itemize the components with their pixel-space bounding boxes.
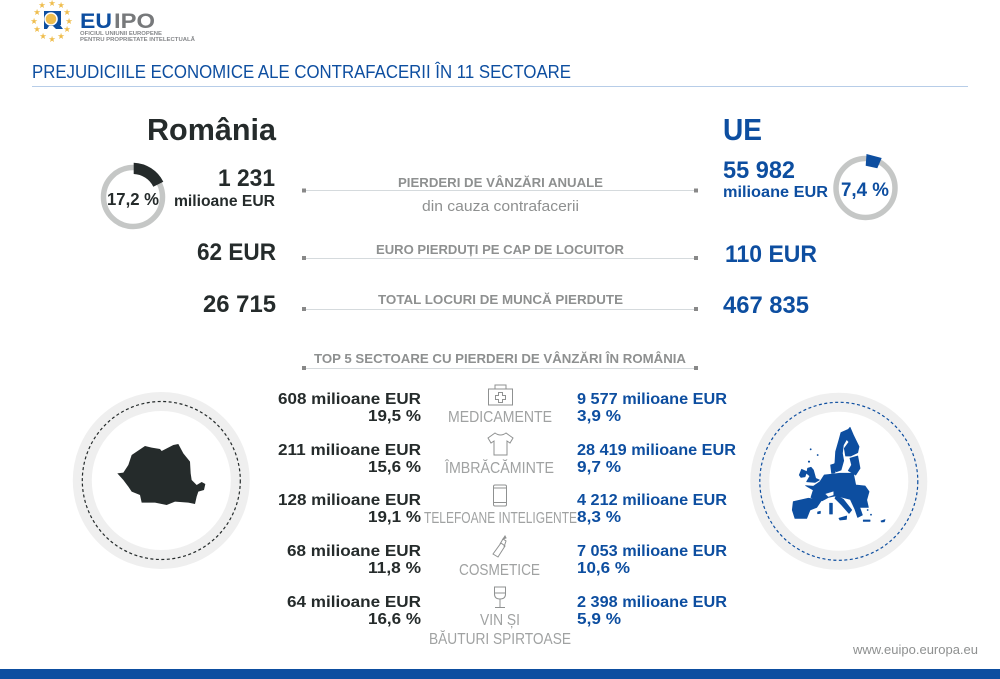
logo: EUIPO: ★ (65, 16, 73, 26)
row: euro per capita label (302, 242, 698, 260)
logo: EUIPO: ★ (57, 31, 65, 41)
heading: UE: UE (723, 112, 762, 147)
row: medicines: 3,9 % (577, 408, 621, 425)
row: smartphones: 128 milioane EUR (278, 492, 421, 509)
row: smartphones: TELEFOANE INTELIGENTE (424, 510, 577, 527)
row: wine and spirits: 2 398 milioane EUR (577, 594, 727, 611)
stat: EU annual sales lost (723, 157, 828, 201)
logo: EUIPO: ★ (39, 31, 47, 41)
row: smartphones (278, 485, 727, 527)
heading: top 5 sectors: TOP 5 SECTOARE CU PIERDERI DE VÂNZĂRI ÎN ROMÂNIA (314, 351, 687, 366)
row: wine and spirits: 5,9 % (577, 611, 621, 628)
logo: EUIPO: ★ (48, 34, 56, 44)
row: cosmetics: 11,8 % (368, 560, 421, 577)
logo: EUIPO: PENTRU PROPRIETATE INTELECTUALĂ (80, 36, 195, 43)
map: Romania (82, 402, 240, 560)
row: wine and spirits (287, 587, 727, 648)
row: clothing (278, 433, 736, 477)
logo: EUIPO: ★ (63, 24, 71, 34)
logo: EUIPO: EU (80, 10, 112, 33)
donut: EU 7.4%: 7,4 % (841, 179, 889, 201)
logo: EUIPO: ★ (33, 24, 41, 34)
row: cosmetics: COSMETICE (459, 562, 540, 579)
map: EU (760, 402, 918, 560)
stat: Romania annual sales lost: milioane EUR (174, 193, 275, 210)
row: medicines: MEDICAMENTE (448, 409, 552, 426)
row: wine and spirits: 64 milioane EUR (287, 594, 421, 611)
row: clothing: 211 milioane EUR (278, 442, 421, 459)
logo: EUIPO: ★ (30, 16, 38, 26)
row: cosmetics: 68 milioane EUR (287, 543, 421, 560)
logo: EUIPO: OFICIUL UNIUNII EUROPENE (80, 31, 162, 37)
donut: Romania 17.2%: 17,2 % (107, 189, 159, 209)
stat: Romania jobs lost: 26 715 (203, 291, 276, 318)
stat: Romania annual sales lost: 1 231 (218, 165, 275, 192)
donut: EU 7.4% (836, 154, 895, 218)
row: cosmetics: 7 053 milioane EUR (577, 543, 727, 560)
row: annual sales lost label: din cauza contrafacerii (422, 198, 579, 215)
row: jobs lost label (302, 292, 698, 311)
stat: EU euro per capita: 110 EUR (725, 241, 817, 268)
logo: EUIPO: IPO (114, 10, 155, 33)
row: medicines: 9 577 milioane EUR (577, 391, 727, 408)
row: medicines: 19,5 % (368, 408, 421, 425)
row: cosmetics (287, 536, 727, 579)
row: annual sales lost label (302, 175, 698, 215)
row: medicines (278, 385, 727, 426)
stat: EU annual sales lost: 55 982 (723, 157, 795, 184)
row: jobs lost label: TOTAL LOCURI DE MUNCĂ PIERDUTE (378, 292, 623, 307)
stat: EU jobs lost: 467 835 (723, 292, 809, 319)
logo: EUIPO: ★ (63, 7, 71, 17)
heading: România: România (147, 112, 277, 147)
row: wine and spirits: 16,6 % (368, 611, 421, 628)
row: clothing: 15,6 % (368, 459, 421, 476)
row: euro per capita label: EURO PIERDUȚI PE CAP DE LOCUITOR (376, 242, 625, 257)
row: clothing: ÎMBRĂCĂMINTE (444, 458, 554, 477)
stat: EU annual sales lost: milioane EUR (723, 184, 828, 201)
logo: EUIPO: ★ (33, 7, 41, 17)
row: wine and spirits: VIN ȘI (480, 612, 520, 629)
row: clothing: 28 419 milioane EUR (577, 442, 736, 459)
logo: EUIPO: ★ (57, 0, 65, 10)
stat: Romania annual sales lost (174, 165, 275, 210)
row: annual sales lost label: PIERDERI DE VÂNZĂRI ANUALE (398, 175, 603, 190)
stat: Romania euro per capita: 62 EUR (197, 239, 276, 266)
row: smartphones: 8,3 % (577, 509, 621, 526)
row: smartphones: 4 212 milioane EUR (577, 492, 727, 509)
website link: www.euipo.europa.eu (852, 642, 978, 657)
donut: Romania 17.2% (104, 163, 163, 226)
footer bar (0, 669, 1000, 679)
row: medicines: 608 milioane EUR (278, 391, 421, 408)
row: wine and spirits: BĂUTURI SPIRTOASE (429, 629, 571, 648)
row: cosmetics: 10,6 % (577, 560, 630, 577)
row: smartphones: 19,1 % (368, 509, 421, 526)
logo: EUIPO: ★ (38, 0, 46, 10)
row: clothing: 9,7 % (577, 459, 621, 476)
title: PREJUDICIILE ECONOMICE ALE CONTRAFACERII ÎN 11 SECTOARE (32, 62, 571, 82)
logo: EUIPO (30, 0, 195, 44)
